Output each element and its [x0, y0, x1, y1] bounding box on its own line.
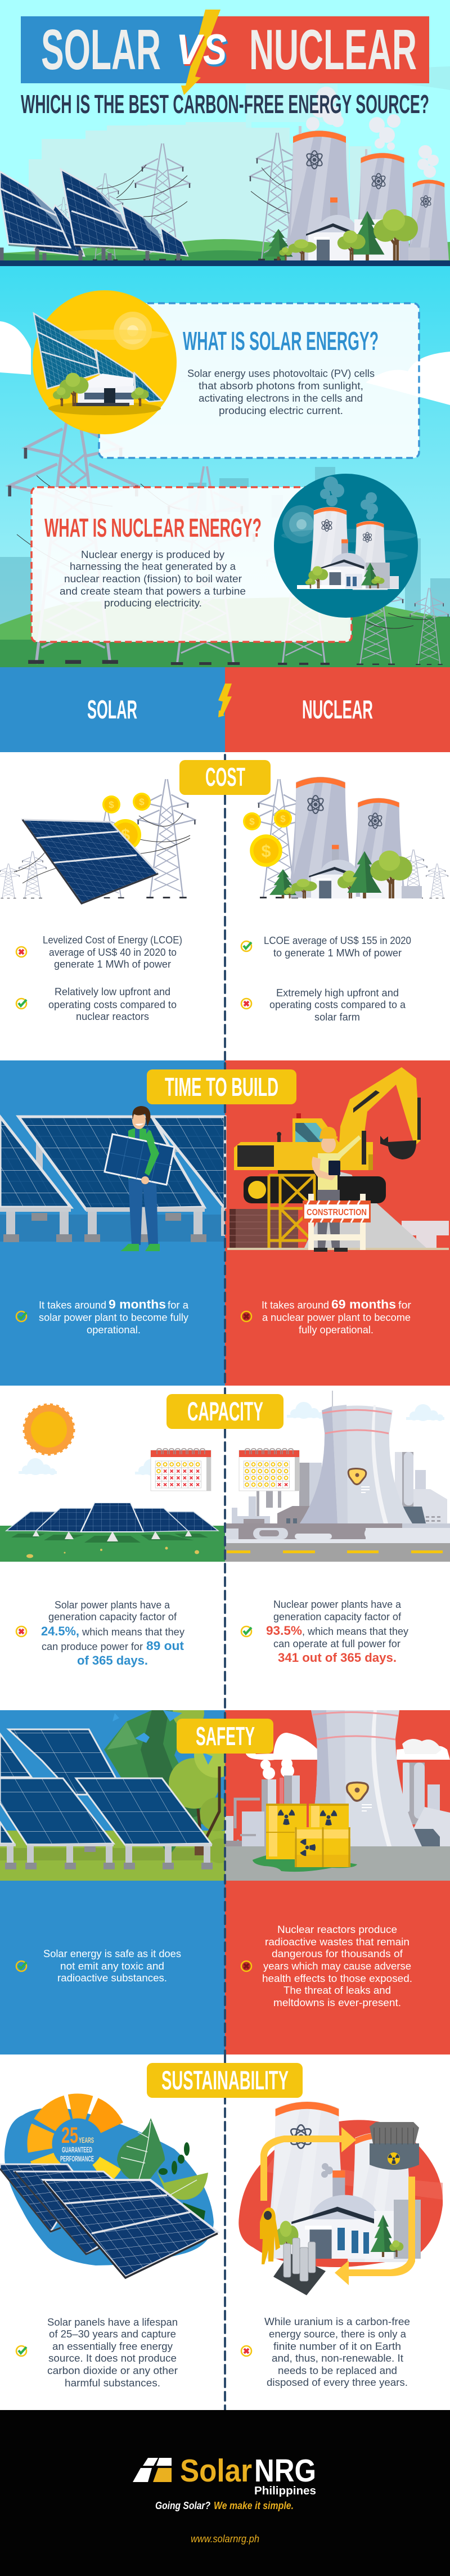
nuclear safety text: The threat of leaks and: [284, 1984, 391, 1996]
badge: cost: [179, 760, 271, 795]
smoke: [306, 87, 439, 178]
solar sustainability text: Solar panels have a lifespan: [47, 2316, 178, 2328]
nuclear safety text: Nuclear reactors produce: [277, 1923, 397, 1935]
logo wordmark: Solar: [180, 2453, 252, 2489]
nuclear building: [306, 197, 357, 260]
solar build time: [16, 1297, 189, 1336]
solar safety text: radioactive substances.: [57, 1972, 167, 1984]
nuclear capacity text: Nuclear power plants have a: [273, 1598, 402, 1610]
nuclear sustainability text: While uranium is a carbon-free: [264, 2316, 410, 2327]
ground bar: [0, 260, 450, 266]
city silhouette: [0, 467, 450, 659]
tagline: We make it simple.: [214, 2500, 294, 2511]
fuel bucket: [370, 2122, 419, 2170]
text: solar definition: activating electrons in the cells and: [199, 393, 363, 404]
solar capacity text: 24.5%,: [41, 1624, 79, 1638]
solar sustainability text: [16, 2316, 178, 2389]
tree by worker: [275, 2221, 298, 2259]
icon: lightning bolt: [218, 684, 232, 717]
nuclear cost points: Extremely high upfront and: [276, 987, 399, 999]
badge: capacity: [166, 1394, 284, 1429]
text: solar definition: [187, 368, 375, 416]
logo wordmark: [180, 2453, 316, 2497]
nuclear sustainability text: and, thus, non-renewable. It: [272, 2352, 403, 2364]
solar panels: [0, 2164, 82, 2232]
nuclear safety text: [241, 1923, 412, 2008]
person holding panel: [105, 1106, 174, 1251]
solar cost points: Relatively low upfront and: [55, 986, 170, 997]
solar safety text: not emit any toxic and: [60, 1960, 164, 1972]
blob: [238, 2120, 443, 2267]
panel: intro definitions: [0, 266, 450, 667]
solar sustainability text: source. It does not produce: [48, 2352, 177, 2364]
hills: [0, 239, 450, 260]
heading: solar: SOLAR: [87, 695, 137, 724]
nuclear capacity text: , which means that they: [302, 1625, 409, 1637]
ground: [0, 596, 450, 667]
panel: time to build: [0, 1060, 450, 1386]
solar capacity text: which means that they: [82, 1626, 185, 1638]
gauge: [25, 2091, 130, 2197]
solar sustainability text: harmful substances.: [65, 2377, 160, 2389]
nuclear cost points: solar farm: [314, 1011, 360, 1023]
solar build time: It takes around: [39, 1299, 106, 1311]
nuclear safety text: meltdowns is ever-present.: [273, 1997, 401, 2008]
solar panels: [7, 1846, 210, 1863]
nuclear capacity text: generation capacity factor of: [273, 1611, 402, 1622]
nuclear sustainability text: [241, 2316, 410, 2388]
solar capacity text: of 365 days.: [77, 1653, 148, 1667]
pylons: [10, 394, 448, 665]
icon: solar plant circle: [33, 290, 177, 434]
title banner: SOLAR: [41, 19, 161, 82]
illustration: solar field: [0, 1503, 225, 1562]
towers: [348, 2132, 415, 2262]
nuclear sustainability text: needs to be replaced and: [278, 2364, 397, 2376]
clouds: [0, 321, 450, 405]
nuclear capacity text: 93.5%: [266, 1624, 302, 1638]
nuclear build time: It takes around: [262, 1299, 329, 1311]
nuclear safety text: health effects to those exposed.: [262, 1972, 412, 1984]
text: solar definition: producing electric current.: [219, 405, 343, 416]
heading: nuclear: WHAT IS NUCLEAR ENERGY?: [44, 513, 262, 542]
trees: [264, 209, 430, 260]
title banner: [21, 10, 429, 95]
badge: safety: SAFETY: [196, 1721, 255, 1751]
solar cost points: operating costs compared to: [48, 999, 177, 1010]
calendar: nuclear 341 days: [239, 1449, 299, 1491]
trees: [104, 1710, 225, 1863]
solar cost points: Levelized Cost of Energy (LCOE): [43, 934, 182, 946]
title banner: S: [203, 26, 227, 74]
title banner: V: [177, 28, 205, 75]
text: nuclear definition: [60, 549, 246, 609]
nuclear sustainability text: disposed of every three years.: [267, 2376, 408, 2388]
panel: hero: [0, 0, 450, 266]
title banner: S: [205, 28, 228, 76]
solar cost points: generate 1 MWh of power: [54, 958, 171, 970]
footer: [0, 2410, 450, 2576]
cycle arrows: [260, 2127, 415, 2285]
icon: nuclear plant circle: [274, 474, 418, 618]
sign: construction: CONSTRUCTION: [307, 1208, 367, 1217]
nuclear safety text: radioactive wastes that remain: [265, 1936, 410, 1948]
solar build time: operational.: [87, 1324, 141, 1336]
label: 25 years: [60, 2123, 94, 2163]
label: 25 years: YEARS: [79, 2136, 94, 2145]
panel: capacity: [0, 1386, 450, 1710]
waste barrels: [253, 1804, 357, 1872]
nuclear capacity text: [241, 1598, 409, 1665]
text: solar definition: Solar energy uses photovoltaic (PV) cells: [187, 368, 375, 379]
solar build time: for a: [168, 1299, 189, 1311]
card: what is nuclear energy: [32, 487, 352, 642]
badge: capacity: CAPACITY: [187, 1396, 263, 1426]
badge: time to build: [147, 1069, 296, 1104]
text: nuclear definition: harnessing the heat generated by a: [70, 561, 236, 572]
badge: sustainability: SUSTAINABILITY: [161, 2065, 289, 2095]
solar safety text: [16, 1948, 181, 1984]
solar panels: [0, 169, 188, 260]
sign: construction: [303, 1194, 371, 1250]
label: 25 years: GUARANTEED: [62, 2145, 92, 2154]
nuclear capacity text: 341 out of 365 days.: [278, 1651, 397, 1665]
nuclear cost points: operating costs compared to a: [269, 999, 406, 1010]
solar sustainability text: of 25–30 years and capture: [49, 2328, 176, 2340]
solar capacity text: Solar power plants have a: [55, 1599, 170, 1611]
title banner: V: [176, 26, 204, 74]
illustration: solar sustainability: [0, 2091, 218, 2278]
solar capacity text: 89 out: [146, 1639, 184, 1653]
text: nuclear definition: nuclear reaction (fission) to boil water: [64, 573, 242, 585]
illustration: solar installer: [0, 1117, 225, 1242]
nuclear sustainability text: finite number of it on Earth: [273, 2340, 401, 2352]
nuclear cost points: [241, 934, 411, 1023]
illustration: nuclear plant: [225, 1391, 450, 1562]
panel: safety: [0, 1697, 450, 2054]
solar cost points: average of US$ 40 in 2020 to: [49, 946, 177, 958]
solar cost points: [16, 934, 182, 1022]
logo icon: [133, 2458, 172, 2482]
skyline: [186, 84, 338, 225]
solar safety text: Solar energy is safe as it does: [43, 1948, 181, 1959]
nuclear build time: 69 months: [331, 1297, 396, 1311]
text: nuclear definition: producing electricity.: [104, 597, 202, 609]
nuclear safety text: dangerous for thousands of: [272, 1948, 403, 1959]
cooling towers: [286, 126, 449, 260]
nuclear build time: for: [398, 1299, 411, 1311]
nuclear build time: [241, 1297, 411, 1336]
solar build time: solar power plant to become fully: [39, 1311, 189, 1323]
badge: time to build: TIME TO BUILD: [165, 1072, 278, 1102]
website: www.solarnrg.ph: [191, 2533, 259, 2544]
card: what is solar energy: [99, 303, 419, 458]
badge: sustainability: [147, 2063, 303, 2098]
blob: [4, 2108, 214, 2265]
nuclear sustainability text: energy source, there is only a: [269, 2328, 407, 2340]
badge: cost: COST: [205, 762, 245, 792]
panel: cost: [0, 752, 450, 1060]
nuclear safety text: years which may cause adverse: [263, 1960, 411, 1972]
solar cost points: nuclear reactors: [76, 1010, 149, 1022]
text: solar definition: that absorb photons from sunlight,: [199, 380, 363, 392]
solar capacity text: can produce power for: [42, 1640, 143, 1652]
label: 25 years: 25: [61, 2123, 78, 2148]
solar sustainability text: an essentially free energy: [52, 2340, 173, 2352]
panel: solar vs nuclear header: [0, 667, 450, 752]
illustration: construction: [227, 1067, 449, 1252]
label: 25 years: PERFORMANCE: [60, 2154, 94, 2163]
illustration: nuclear cost: [243, 777, 448, 898]
text: nuclear definition: and create steam that powers a turbine: [60, 586, 246, 597]
leaves: [117, 2118, 208, 2222]
tagline: [155, 2500, 294, 2511]
illustration: nuclear sustainability: [238, 2101, 443, 2295]
calendar: solar 89 days: [151, 1449, 211, 1491]
illustration: solar cost: [0, 779, 195, 903]
nuclear cost points: to generate 1 MWh of power: [273, 947, 402, 959]
logo wordmark: Philippines: [254, 2485, 316, 2497]
illustration: solar safe: [0, 1710, 225, 1881]
panel: sustainability: [0, 2054, 450, 2410]
nuclear cost points: LCOE average of US$ 155 in 2020: [264, 934, 411, 946]
solar build time: 9 months: [109, 1297, 166, 1311]
worker and fuel cart: [260, 2208, 326, 2295]
solar capacity text: generation capacity factor of: [48, 1611, 177, 1622]
clouds: [19, 1402, 444, 1476]
building: [291, 2170, 379, 2259]
text: nuclear definition: Nuclear energy is produced by: [81, 549, 224, 560]
nuclear build time: a nuclear power plant to become: [262, 1311, 411, 1323]
solar sustainability text: carbon dioxide or any other: [47, 2364, 178, 2376]
nuclear build time: fully operational.: [299, 1324, 374, 1336]
solar capacity text: [16, 1599, 185, 1667]
pylons: [53, 133, 304, 260]
logo wordmark: NRG: [254, 2453, 316, 2489]
badge: safety: [177, 1719, 273, 1754]
nuclear capacity text: can operate at full power for: [273, 1638, 400, 1649]
heading: nuclear: NUCLEAR: [302, 695, 373, 724]
illustration: sun: [24, 1405, 74, 1454]
tagline: Going Solar?: [155, 2500, 210, 2511]
illustration: nuclear waste: [225, 1710, 450, 1881]
